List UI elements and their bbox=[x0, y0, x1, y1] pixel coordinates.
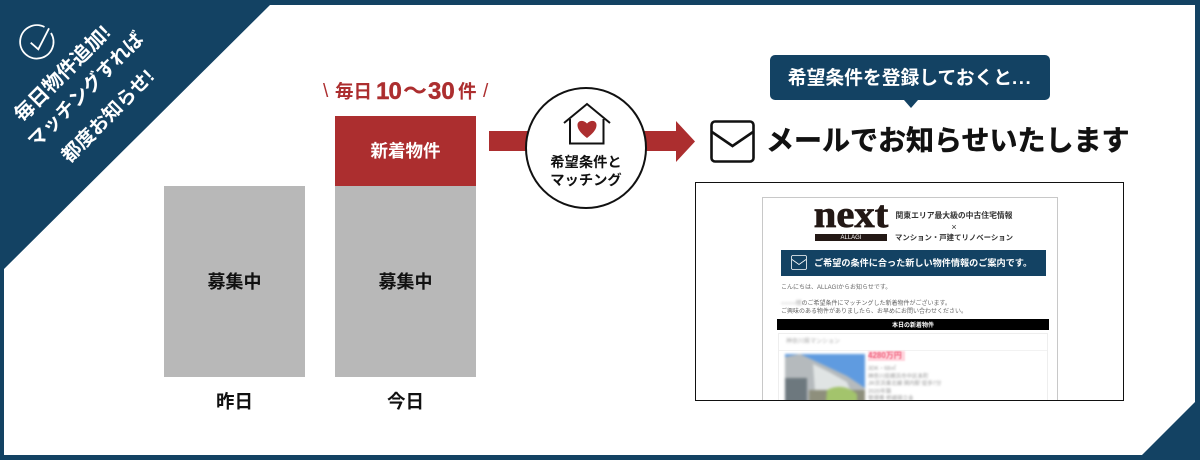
message bbox=[781, 299, 967, 315]
arrow: to matching and email bbox=[489, 121, 695, 162]
tagline: × bbox=[951, 222, 957, 232]
banner text: ご希望の条件に合った新しい物件情報のご案内です。 bbox=[814, 258, 1032, 268]
right slash: / bbox=[483, 81, 488, 102]
email page bbox=[762, 197, 1058, 427]
banner text line 2: マッチングすれば bbox=[25, 29, 149, 153]
label: recruiting today: 募集中 bbox=[378, 272, 432, 292]
circle label bbox=[550, 154, 622, 189]
callout box: 希望条件を登録しておくと... bbox=[788, 67, 1032, 88]
card title: 神奈川県マンション bbox=[786, 339, 840, 345]
tagline: 関東エリア最大級の中古住宅情報 bbox=[896, 211, 1012, 220]
wave dash: ～ bbox=[403, 78, 427, 105]
per day text: 毎日 bbox=[335, 81, 372, 102]
greeting: こんにちは、ALLAGIからお知らせです。 bbox=[781, 285, 891, 291]
logo bar: ALLAGI bbox=[840, 235, 862, 241]
listing photo bbox=[783, 352, 867, 400]
icon: envelope bbox=[710, 120, 755, 163]
listing price: 4280万円 bbox=[868, 351, 902, 360]
number range: 10 bbox=[376, 78, 401, 105]
banner text line 3: 都度お知らせ! bbox=[58, 66, 159, 167]
circle: preference matching bbox=[525, 87, 647, 209]
label: yesterday: 昨日 bbox=[216, 391, 253, 412]
banner: daily listing notice bbox=[10, 21, 159, 167]
icon: check circle bbox=[19, 24, 54, 60]
logo bar bbox=[815, 234, 887, 241]
number range end: 30 bbox=[428, 78, 455, 105]
tagline: マンション・戸建てリノベーション bbox=[895, 233, 1013, 242]
unit: 件 bbox=[458, 81, 477, 102]
icon: house with heart bbox=[563, 102, 611, 144]
circle label: マッチング bbox=[550, 173, 622, 189]
callout: register preferences bbox=[770, 55, 1050, 108]
logo word: next bbox=[814, 194, 888, 236]
banner text line 1: 毎日物件追加! bbox=[10, 21, 116, 127]
circle label: 希望条件と bbox=[550, 155, 622, 171]
bar: today bbox=[335, 186, 476, 377]
callout box bbox=[770, 55, 1050, 100]
panel: email screenshot bbox=[695, 182, 1124, 401]
left slash: \ bbox=[323, 81, 328, 102]
label: recruiting yesterday: 募集中 bbox=[208, 272, 262, 292]
message: ご興味のある物件がありましたら、お早めにお問い合わせください。 bbox=[781, 309, 967, 315]
listing details: 3DK・68㎡ bbox=[868, 366, 896, 372]
card divider bbox=[779, 350, 1047, 351]
bar: new listings bbox=[335, 116, 476, 186]
listing details: 神奈川県横浜市中区本町 bbox=[868, 374, 929, 380]
listing header bbox=[777, 319, 1049, 330]
bar: yesterday bbox=[164, 186, 305, 377]
tagline bbox=[895, 211, 1013, 242]
label: today: 今日 bbox=[387, 391, 424, 412]
heading: email notice: メールでお知らせいたします bbox=[766, 125, 1129, 156]
listing details bbox=[868, 364, 942, 401]
message: ○○○○様 bbox=[781, 301, 802, 307]
icon: small envelope bbox=[791, 255, 807, 270]
listing details: JR京浜東北線 関内駅 徒歩7分 bbox=[868, 381, 941, 387]
email banner bbox=[781, 250, 1046, 276]
callout pointer bbox=[904, 100, 918, 108]
message: のご希望条件にマッチングした新着物件がございます。 bbox=[802, 301, 951, 307]
heading: 10 to 30 per day bbox=[323, 78, 488, 105]
listing details: 2020年築 bbox=[868, 388, 891, 394]
logo: next ALLAGI bbox=[814, 194, 888, 241]
bar: new listings: 新着物件 bbox=[370, 141, 440, 161]
listing card bbox=[778, 333, 1048, 423]
listing header: 本日の新着物件 bbox=[892, 323, 934, 329]
